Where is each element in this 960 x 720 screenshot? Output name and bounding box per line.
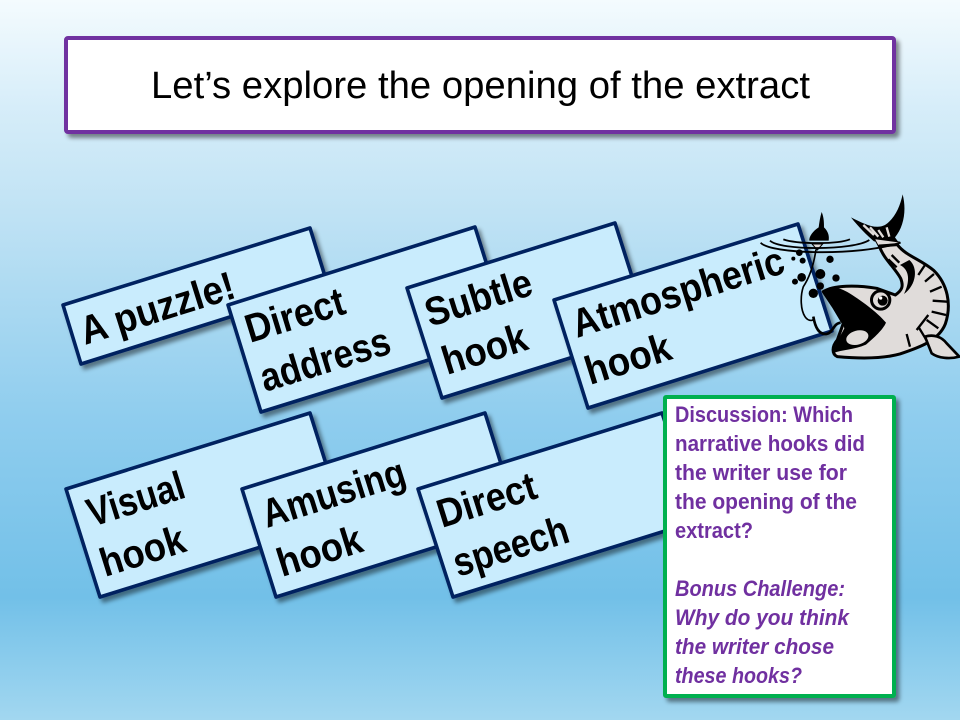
discussion question: extract? [675,518,753,543]
open mouth [823,288,886,353]
card: Direct address: address [255,319,396,401]
card: Subtle hook: hook [437,315,533,384]
fishing float [809,212,829,241]
bonus challenge [675,576,850,688]
body [823,245,948,358]
bonus challenge: Why do you think [675,605,850,630]
card: Atmospheric hook: Atmospheric [567,239,790,347]
card: Visual hook: hook [95,517,191,586]
fishing line and hook [801,249,816,320]
icon: fish on a hook [761,194,959,358]
lower fin [925,336,959,358]
bubbles [791,249,840,298]
tail fin [851,194,904,243]
card: Amusing hook: Amusing [257,450,411,537]
discussion question: Discussion: Which [675,402,853,427]
card: Subtle hook [407,223,650,398]
tongue [845,328,870,347]
dorsal fin and scale stripes [900,260,915,294]
title banner [66,38,894,132]
card: Visual hook: Visual [82,464,190,536]
card: Atmospheric hook [554,224,832,408]
title banner: Let’s explore the opening of the extract [151,65,810,107]
card: Atmospheric hook: hook [580,325,677,394]
card: A puzzle!: A puzzle! [75,264,240,354]
discussion question: the opening of the [675,489,857,514]
discussion question: the writer use for [675,460,847,485]
card: Direct speech: speech [448,508,574,586]
card: Direct address: Direct [240,280,350,352]
card: Amusing hook [242,413,519,597]
card: A puzzle! [63,228,328,364]
card: Direct speech: Direct [432,464,542,537]
discussion question: narrative hooks did [675,431,865,456]
discussion question [675,402,865,543]
card: Direct speech [418,413,697,597]
discussion box [665,397,894,696]
water ripples [761,239,901,252]
card: Direct address [228,227,509,412]
bonus challenge: Bonus Challenge: [675,576,845,601]
card: Subtle hook: Subtle [420,261,538,336]
eye [870,289,891,311]
card: Visual hook [66,413,344,597]
bonus challenge: these hooks? [675,663,802,688]
bonus challenge: the writer chose [675,634,834,659]
card: Amusing hook: hook [272,517,368,586]
